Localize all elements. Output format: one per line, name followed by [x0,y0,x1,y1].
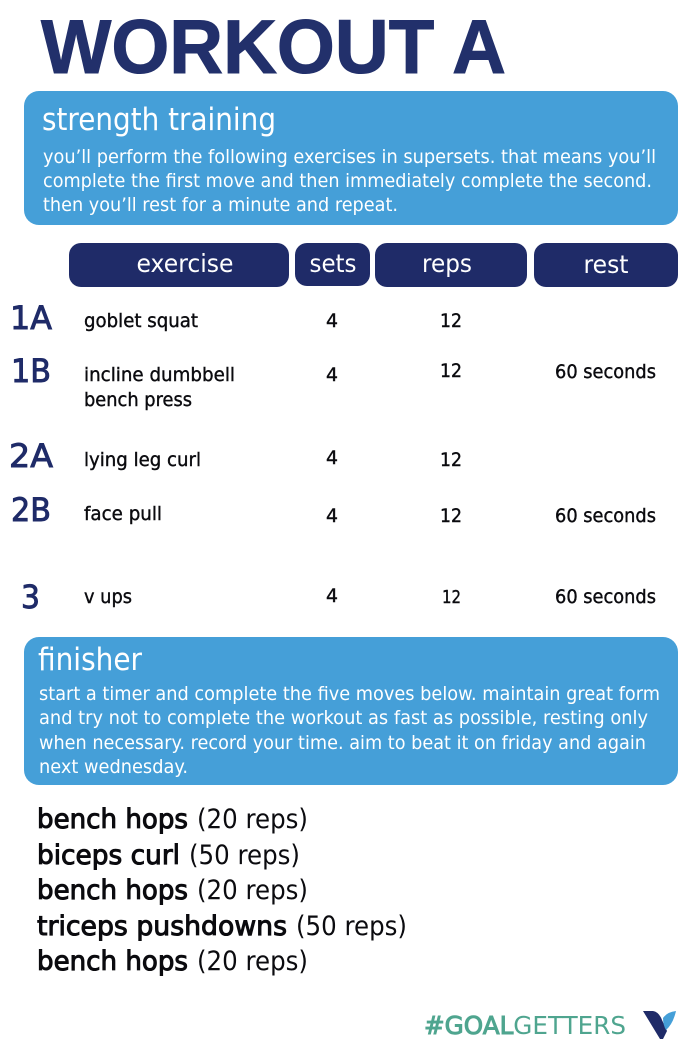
row 1A: goblet squat: 12 [440,310,462,332]
finisher exercise list: bench hops [37,804,188,835]
table header: exercise [69,243,289,287]
finisher exercise list: (50 reps) [296,911,407,942]
footer hashtag: #GOALGETTERS [424,1011,626,1040]
panel text: strength training description: then you’ll rest for a minute and repeat. [43,194,398,216]
table header: exercise: exercise [136,249,234,278]
panel text: finisher description: start a timer and complete the five moves below. maintain great form [39,683,660,705]
table header: sets: sets [310,249,356,278]
row 3: v ups: v ups [84,586,132,608]
row 1A: goblet squat: goblet squat [84,310,198,332]
row 2B: face pull: 60 seconds [555,505,656,527]
row 2A: lying leg curl [9,437,462,475]
row 1A: goblet squat [10,299,462,337]
finisher exercise list: biceps curl [37,840,180,871]
row 1B: incline dumbbell bench press [11,352,656,411]
table header: sets [295,243,370,286]
table header: reps: reps [422,249,472,278]
row 2B: face pull [11,491,656,529]
row 2A: lying leg curl: 4 [326,447,338,469]
row 2B: face pull: 2B [11,491,51,529]
row 1B: incline dumbbell bench press: incline dumbbell [84,364,235,386]
row 2A: lying leg curl: 2A [9,437,53,475]
row 1A: goblet squat: 4 [326,310,338,332]
panel heading: finisher: finisher [38,642,142,678]
row 2B: face pull: 4 [326,505,338,527]
table header: rest: rest [584,250,629,279]
row 2A: lying leg curl: lying leg curl [84,449,201,471]
row 3: v ups: 4 [326,585,338,607]
panel text: finisher description: when necessary. record your time. aim to beat it on friday and again [39,732,646,754]
row 1B: incline dumbbell bench press: 1B [11,352,51,390]
row 1A: goblet squat: 1A [10,299,52,337]
panel text: finisher description: next wednesday. [39,756,188,778]
icon: V logo [643,1011,676,1039]
row 3: v ups: 3 [21,578,40,616]
finisher exercise list: bench hops [37,875,188,906]
panel text: finisher description: and try not to complete the workout as fast as possible, resting only [39,707,648,729]
panel: finisher [24,637,678,785]
finisher exercise list: (50 reps) [189,840,300,871]
finisher exercise list: (20 reps) [197,875,308,906]
row 1B: incline dumbbell bench press: 12 [440,360,462,382]
panel text: strength training description [43,146,656,216]
row 3: v ups: 12 [442,587,461,608]
finisher exercise list [37,804,407,977]
row 2B: face pull: 12 [440,505,462,527]
table header: reps [375,243,527,287]
row 1B: incline dumbbell bench press: 4 [326,364,338,386]
row 3: v ups [21,578,656,616]
row 3: v ups: 60 seconds [555,586,656,608]
table header: rest [534,243,678,287]
row 1B: incline dumbbell bench press: 60 seconds [555,361,656,383]
finisher exercise list: (20 reps) [197,946,308,977]
row 2A: lying leg curl: 12 [440,449,462,471]
panel: strength training [24,91,678,225]
panel heading: strength training: strength training [42,102,276,138]
title: WORKOUT A [41,5,506,90]
finisher exercise list: bench hops [37,946,188,977]
panel text: strength training description: you’ll perform the following exercises in supersets. that means you’ll [43,146,656,168]
panel text: finisher description [39,683,660,778]
panel text: strength training description: complete the first move and then immediately complete the second. [43,170,652,192]
row 2B: face pull: face pull [84,503,162,525]
finisher exercise list: triceps pushdowns [37,911,287,942]
finisher exercise list: (20 reps) [197,804,308,835]
row 1B: incline dumbbell bench press: bench press [84,389,192,411]
